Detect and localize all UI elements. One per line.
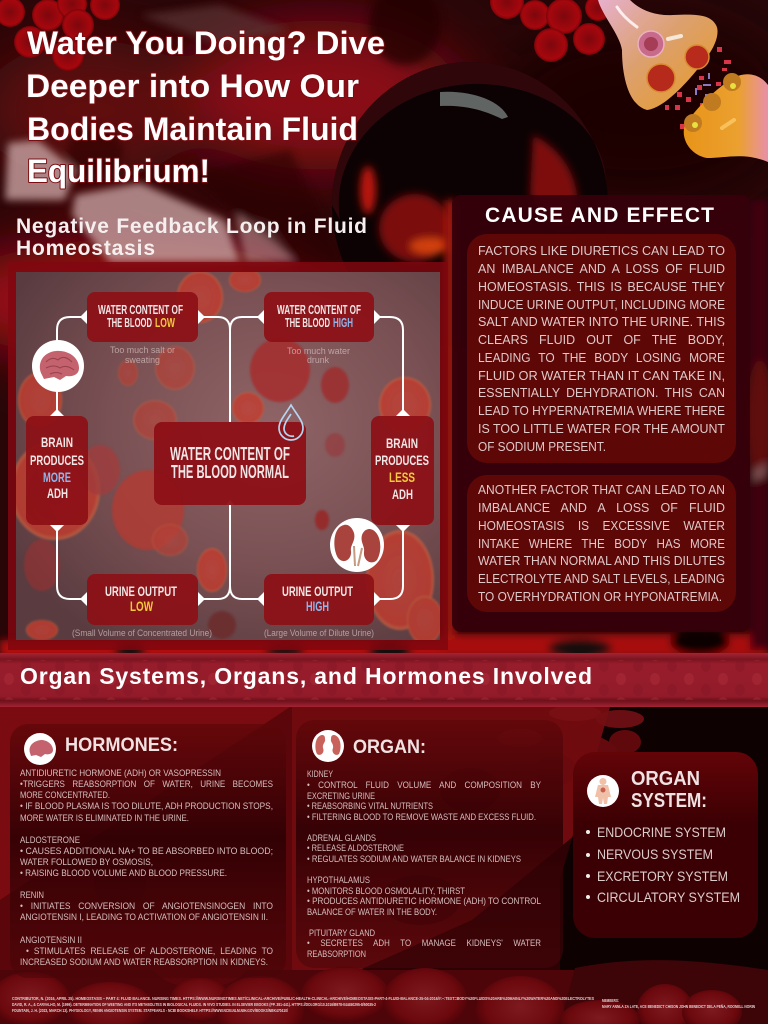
heading: organ system: ORGAN — [631, 768, 700, 790]
box: brain produces more adh: ADH — [47, 485, 68, 501]
icon: kidneys — [312, 730, 344, 762]
title — [26, 25, 385, 189]
panel: feedback loop diagram — [8, 262, 448, 650]
box: water content high — [264, 292, 374, 342]
text block: hypothalamus: • PRODUCES ANTIDIURETIC HORMONE (ADH) TO CONTROL — [307, 895, 541, 906]
heading: negative feedback loop: Homeostasis — [16, 237, 155, 260]
note: too much water — [287, 346, 350, 365]
text block: excessive water intake: HOMEOSTASIS IS EXCESSIVE WATER — [478, 518, 725, 533]
text block: pituitary gland: • SECRETES ADH TO MANAGE KIDNEYS' WATER — [307, 937, 541, 948]
list: organ systems: ENDOCRINE SYSTEM — [597, 824, 726, 840]
note: too much water: drunk — [307, 355, 329, 365]
note: too much salt: Too much salt or — [110, 345, 175, 355]
background: upper blood scene — [0, 0, 768, 660]
box: brain produces less adh — [371, 416, 434, 525]
references: DAVID, R. A., & CARVALHO, M. (1999). DETERMINATION OF WEETING AND ITS METABOLITES IN BIOLOGICAL FLUIDS. IN VIVO STUDIES. IN ELSEVIER EBOOKS (PP. 381-441). HTTPS://DOI.ORG/10.1016/B978-044450295-8/50035-2 — [12, 1002, 376, 1007]
icon: bottom row of blood cells — [0, 967, 742, 1024]
text block: aldosterone: • CAUSES ADDITIONAL NA+ TO BE ABSORBED INTO BLOOD; — [20, 845, 273, 856]
text block: diuretics: OF SODIUM PRESENT. — [478, 439, 606, 454]
text block: adrenal glands — [307, 832, 521, 864]
box: water content low: THE BLOOD — [107, 315, 152, 330]
text block: aldosterone: WATER FOLLOWED BY OSMOSIS, — [20, 856, 153, 867]
text block: kidney: • REABSORBING VITAL NUTRIENTS — [307, 800, 433, 811]
heading: hormones: HORMONES: — [65, 735, 178, 756]
list: organ systems: EXCRETORY SYSTEM — [597, 868, 728, 884]
heading: negative feedback loop — [16, 215, 367, 260]
text block: excessive water intake — [467, 475, 736, 612]
box: brain produces more adh — [26, 416, 88, 525]
panel: organ system — [573, 752, 758, 938]
members: MEMBERS: — [602, 998, 619, 1003]
text block: angiotensin: ANGIOTENSIN II — [20, 934, 82, 945]
title: Deeper into How Our — [26, 68, 359, 104]
text block: diuretics: LEADING TO THE BODY LOSING MORE — [478, 350, 725, 365]
text block: excessive water intake: INTAKE WHERE THE BODY HAS MORE — [478, 536, 725, 551]
box: water content high: HIGH — [333, 315, 353, 330]
text block: adh: MORE WATER IS ELIMINATED IN THE URINE. — [20, 812, 189, 823]
text block: adh: • IF BLOOD PLASMA IS TOO DILUTE, ADH PRODUCTION STOPS, — [20, 800, 273, 811]
text block: kidney: EXCRETING URINE — [307, 790, 375, 801]
icon: red blood cell cluster top left — [0, 0, 120, 71]
icon: brain — [32, 340, 84, 392]
background blood cells in diagram — [10, 268, 443, 644]
box: brain produces more adh: MORE — [43, 469, 71, 485]
box: urine output low: LOW — [130, 598, 154, 614]
list: organ systems: CIRCULATORY SYSTEM — [597, 889, 740, 905]
box: water content normal: WATER CONTENT OF — [170, 444, 290, 464]
box: brain produces less adh: PRODUCES — [375, 452, 429, 468]
title: Equilibrium! — [27, 153, 210, 189]
text block: excessive water intake: WATER THAN NORMAL AND THIS DILUTES — [478, 553, 725, 568]
text block: diuretics: IS TOO LITTLE WATER FOR THE AMOUNT — [478, 421, 725, 436]
icon: floating blood cells — [162, 707, 644, 985]
note: small volume: (Small Volume of Concentrated Urine) — [72, 628, 212, 638]
text block: aldosterone: • RAISING BLOOD VOLUME AND BLOOD PRESSURE. — [20, 867, 227, 878]
heading: negative feedback loop: Negative Feedback Loop in Fluid — [16, 215, 367, 238]
text block: adh: •TRIGGERS REABSORPTION OF WATER, URINE BECOMES — [20, 778, 273, 789]
box: water content high: THE BLOOD — [285, 315, 330, 330]
text block: pituitary gland — [307, 927, 541, 959]
list: organ systems — [586, 824, 740, 905]
box: brain produces more adh: BRAIN — [41, 434, 73, 450]
icon: human body — [587, 775, 619, 807]
box: brain produces less adh: ADH — [392, 486, 413, 502]
text block: adh — [20, 767, 273, 823]
box: urine output low: URINE OUTPUT — [105, 583, 177, 599]
text block: renin: • INITIATES CONVERSION OF ANGIOTENSINOGEN INTO — [20, 900, 273, 911]
banner: organ systems heading: Organ Systems, Organs, and Hormones Involved — [20, 663, 592, 689]
text block: kidney — [307, 768, 542, 822]
icon: red blood cell cluster top right — [490, 0, 611, 62]
title: Water You Doing? Dive — [27, 25, 385, 61]
icon: kidneys — [330, 518, 384, 572]
text block: hypothalamus: • MONITORS BLOOD OSMOLALITY, THIRST — [307, 885, 465, 896]
text block: angiotensin: INCREASED SODIUM AND WATER REABSORPTION IN KIDNEYS. — [20, 956, 268, 967]
text block: angiotensin — [20, 934, 273, 967]
text block: kidney: • FILTERING BLOOD TO REMOVE WASTE AND EXCESS FLUID. — [307, 811, 536, 822]
text block: diuretics: INDUCE URINE OUTPUT, INCLUDING MORE — [478, 297, 725, 312]
text block: diuretics: FACTORS LIKE DIURETICS CAN LEAD TO — [478, 243, 725, 258]
text block: diuretics: AN IMBALANCE AND A LOSS OF FLUID — [478, 261, 725, 276]
text block: diuretics — [467, 234, 736, 463]
text block: kidney: KIDNEY — [307, 768, 334, 779]
text block: aldosterone: ALDOSTERONE — [20, 834, 80, 845]
box: urine output low — [87, 574, 198, 625]
text block: excessive water intake: TO OVERHYDRATION OR HYPONATREMIA. — [478, 589, 722, 604]
text block: adh: MORE CONCENTRATED. — [20, 789, 110, 800]
box: water content high: WATER CONTENT OF — [277, 302, 361, 317]
text block: excessive water intake: ANOTHER FACTOR THAT CAN LEAD TO AN — [478, 482, 725, 497]
text block: hypothalamus: BALANCE OF WATER IN THE BODY. — [307, 906, 437, 917]
panel: hormones — [10, 724, 286, 978]
box: urine output high: HIGH — [306, 598, 329, 614]
text block: diuretics: ESSENTIALLY DEHYDRATION. THIS CAN — [478, 385, 725, 400]
text block: aldosterone — [20, 834, 273, 878]
text block: adh: ANTIDIURETIC HORMONE (ADH) OR VASOPRESSIN — [20, 767, 221, 778]
icon: brain — [24, 733, 56, 765]
icon: water drop — [279, 405, 303, 440]
text block: diuretics: HOMEOSTASIS. THIS IS BECAUSE THEY — [478, 279, 725, 294]
text block: adrenal glands: ADRENAL GLANDS — [307, 832, 376, 843]
panel: organ — [296, 720, 563, 968]
heading: organ system — [631, 768, 707, 812]
box: water content normal — [154, 422, 306, 505]
icon: synapse — [598, 0, 768, 162]
members — [602, 998, 755, 1009]
arrows: loop connectors — [50, 310, 410, 606]
text block: hypothalamus — [307, 874, 541, 917]
text block: renin: ANGIOTENSIN I, LEADING TO ACTIVATION OF ANGIOTENSIN II. — [20, 911, 268, 922]
title: Bodies Maintain Fluid — [27, 111, 358, 147]
text block: diuretics: CLEARS FLUID OUT OF THE BODY, — [478, 332, 725, 347]
box: brain produces less adh: BRAIN — [386, 435, 418, 451]
background: lower blood vessel scene — [0, 705, 768, 1024]
note: too much salt: sweating — [125, 355, 160, 365]
box: brain produces less adh: LESS — [389, 469, 415, 485]
references — [12, 996, 594, 1013]
text block: angiotensin: • STIMULATES RELEASE OF ALDOSTERONE, LEADING TO — [26, 945, 273, 956]
box: urine output high — [264, 574, 374, 625]
text block: kidney: • CONTROL FLUID VOLUME AND COMPOSITION BY — [307, 779, 542, 790]
heading: cause and effect: CAUSE AND EFFECT — [485, 204, 714, 227]
text block: renin — [20, 889, 273, 922]
heading: organ: ORGAN: — [353, 737, 426, 758]
text block: excessive water intake: IMBALANCE AND A LOSS OF FLUID — [478, 500, 725, 515]
note: large volume: (Large Volume of Dilute Urine) — [264, 628, 374, 638]
text block: diuretics: LEAD TO HYPERNATREMIA WHERE THERE — [478, 403, 725, 418]
note: too much salt — [110, 345, 175, 365]
text block: pituitary gland: REABSORPTION — [307, 948, 366, 959]
note: too much water: Too much water — [287, 346, 350, 356]
text block: excessive water intake: ELECTROLYTE AND SALT LEVELS, LEADING — [478, 571, 725, 586]
box: brain produces more adh: PRODUCES — [30, 452, 84, 468]
text block: adrenal glands: • REGULATES SODIUM AND WATER BALANCE IN KIDNEYS — [307, 853, 521, 864]
heading: organ system: SYSTEM: — [631, 790, 707, 812]
box: water content normal: THE BLOOD NORMAL — [171, 462, 289, 482]
box: urine output high: URINE OUTPUT — [282, 583, 353, 599]
text block: renin: RENIN — [20, 889, 44, 900]
panel: cause and effect — [452, 195, 750, 632]
text block: pituitary gland: PITUITARY GLAND — [309, 927, 375, 938]
text block: diuretics: SALT AND WATER INTO THE URINE. THIS — [478, 314, 725, 329]
list: organ systems: NERVOUS SYSTEM — [597, 846, 713, 862]
box: water content low: LOW — [155, 315, 175, 330]
references: CONTRIBUTOR, N. (2016, APRIL 25). HOMEOSTASIS – PART 4: FLUID BALANCE. NURSING TIMES. HTTPS://WWW.NURSINGTIMES.NET/CLINICAL-ARCHIVE/PUBLIC-HEALTH-CLINICAL-ARCHIVE/HOMEOSTASIS-PART-4-FLUID-BALANCE-25-04-2016/#:~:TEXT=BODY%20FLUIDS%20ARE%20MAINLY%20WATER%20AND%20ELECTROLYTES — [12, 996, 594, 1001]
box: water content low: WATER CONTENT OF — [98, 302, 183, 317]
banner: organ systems heading — [0, 653, 768, 707]
text block: diuretics: FLUID OR WATER THAN IT CAN TAKE IN, — [478, 368, 725, 383]
text block: hypothalamus: HYPOTHALAMUS — [307, 874, 370, 885]
box: water content low — [87, 292, 198, 342]
icon: dark glass sphere — [332, 62, 608, 262]
text block: adrenal glands: • RELEASE ALDOSTERONE — [307, 842, 404, 853]
references: FOUNTAIN, J. H. (2023, MARCH 13). PHYSIOLOGY, RENIN ANGIOTENSIN SYSTEM. STATPEARLS - NCBI BOOKSHELF. HTTPS://WWW.NCBI.NLM.NIH.GOV/BOOKS/NBK470410/ — [12, 1008, 289, 1013]
